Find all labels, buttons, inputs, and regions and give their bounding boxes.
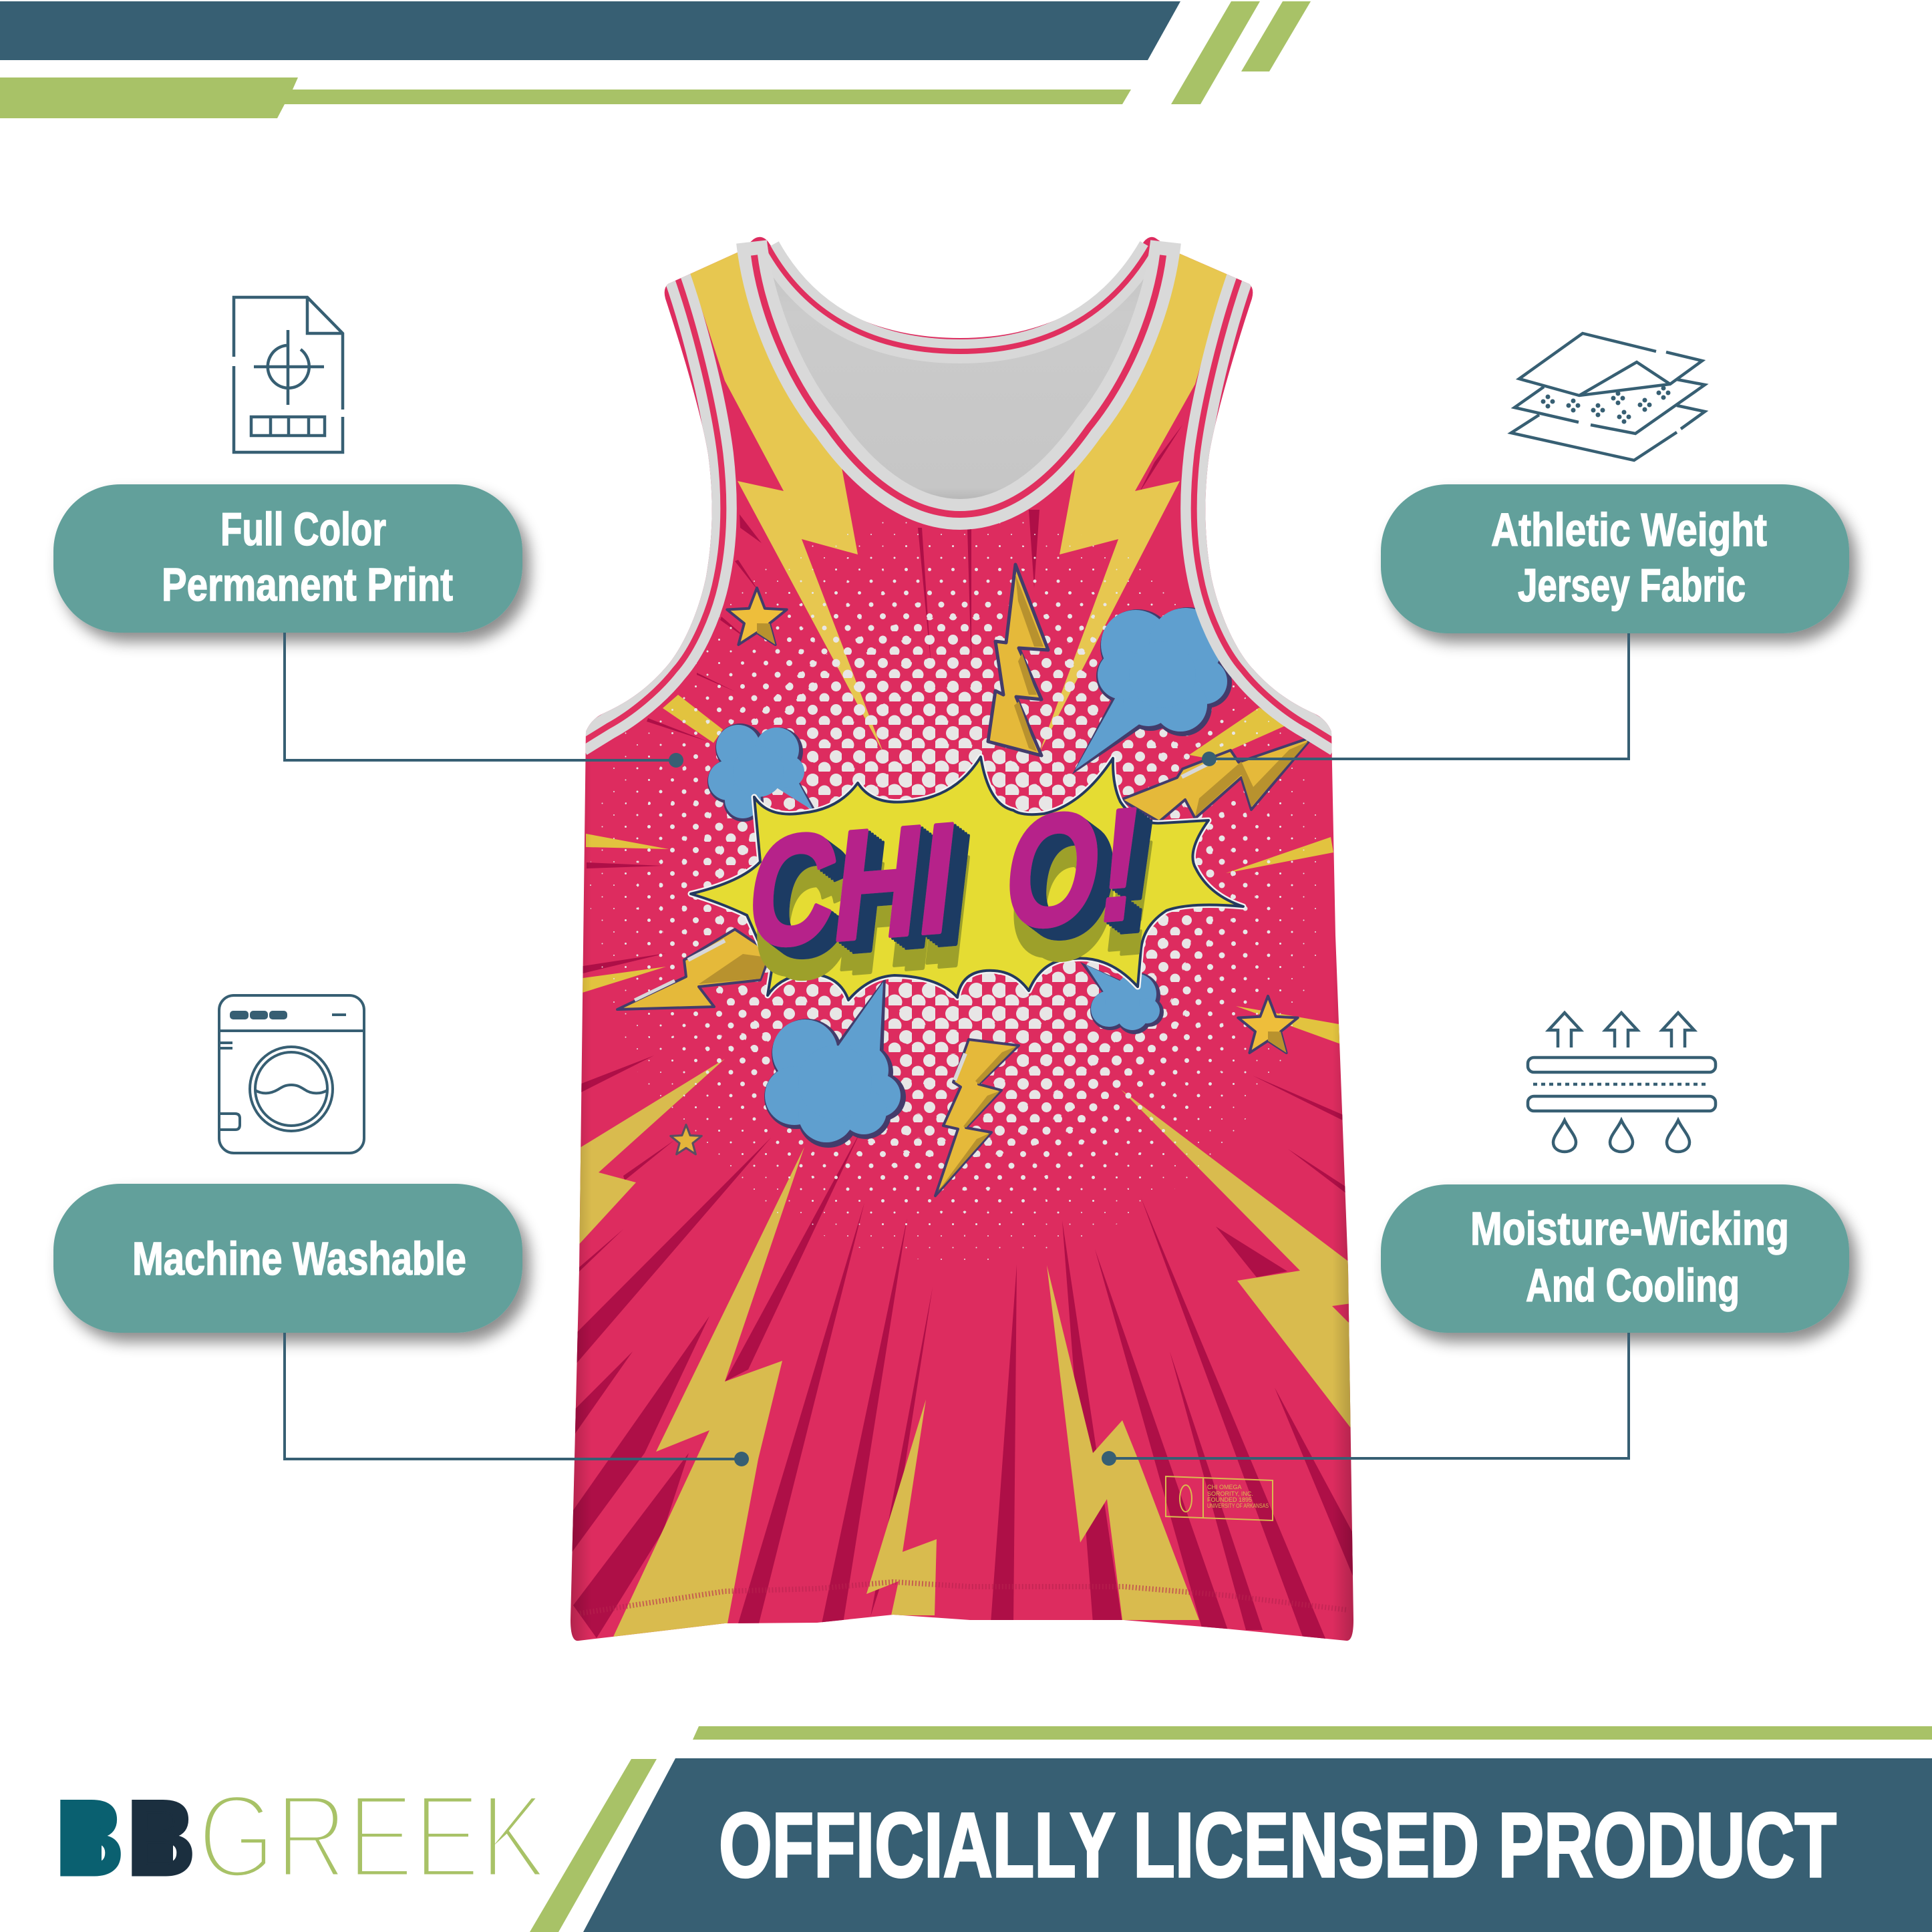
logo: BB Greek: B xyxy=(55,1778,124,1899)
cloud lower right xyxy=(1080,962,1164,1034)
CHI O! lettering: O! xyxy=(997,774,1150,963)
connector: full color to jersey xyxy=(285,633,683,768)
star upper left xyxy=(727,588,787,645)
left armhole trim xyxy=(580,277,723,744)
footer banner xyxy=(583,1758,1932,1932)
front collar xyxy=(752,242,1166,514)
star right xyxy=(1238,996,1298,1053)
green slash long xyxy=(1171,1,1260,104)
logo: BB Greek: GREEK xyxy=(198,1770,546,1903)
feature pill: athletic weight: Jersey Fabric xyxy=(1518,559,1746,611)
logo: BB Greek xyxy=(55,1770,546,1903)
icon: print file xyxy=(234,297,343,452)
CHI O! lettering xyxy=(740,774,1150,981)
sorority label tag: SORORITY, INC. xyxy=(1207,1490,1253,1497)
lightning bolt top centre xyxy=(988,565,1048,756)
feature pill: machine washable xyxy=(53,1184,522,1333)
hem stitching xyxy=(580,1582,1348,1613)
logo: BB Greek: B xyxy=(126,1778,196,1899)
feature pill: moisture wicking: Moisture-Wicking xyxy=(1470,1202,1789,1255)
right armhole trim xyxy=(1194,277,1337,744)
feature pill: athletic weight xyxy=(1381,484,1849,633)
sorority label tag: CHI OMEGA xyxy=(1207,1484,1242,1490)
feature pill: full color: Permanent Print xyxy=(162,558,453,611)
inner back of jersey xyxy=(766,247,1152,514)
star lower left xyxy=(671,1125,701,1154)
sorority label tag: FOUNDED 1895 xyxy=(1207,1496,1252,1503)
feature pill: athletic weight: Athletic Weight xyxy=(1491,504,1767,556)
cloud upper left xyxy=(707,723,818,822)
top green bar xyxy=(0,77,1131,118)
connector: machine washable to jersey xyxy=(285,1333,749,1466)
yellow lightning bolts and bursts xyxy=(575,247,1356,1637)
feature pill: full color xyxy=(53,484,522,633)
lightning bolt right xyxy=(1121,737,1313,822)
icon: fabric layers xyxy=(1511,333,1705,460)
lightning bolt left xyxy=(617,929,771,1009)
footer green bar xyxy=(693,1726,1932,1740)
lightning bolt bottom centre xyxy=(935,1039,1019,1196)
edge shading xyxy=(568,735,1356,1643)
connector: athletic weight to jersey xyxy=(1202,633,1629,766)
radiating dark rays xyxy=(571,425,1356,1640)
top banner bars xyxy=(0,1,1311,118)
icon: moisture wicking xyxy=(1528,1013,1716,1152)
comic burst star xyxy=(691,757,1243,1000)
icon: washing machine xyxy=(219,995,364,1153)
CHI O! lettering: CHI xyxy=(740,789,964,981)
feature pill: moisture wicking xyxy=(1381,1184,1849,1333)
back collar xyxy=(768,247,1150,351)
feature pill: moisture wicking: And Cooling xyxy=(1526,1259,1740,1311)
cloud top right xyxy=(1072,607,1232,774)
feature pill: machine washable: Machine Washable xyxy=(132,1233,466,1285)
green slash short xyxy=(1241,1,1311,71)
top dark bar xyxy=(0,1,1180,60)
footer green slash xyxy=(530,1759,657,1932)
jersey printed body xyxy=(561,227,1363,1650)
connector: moisture wicking to jersey xyxy=(1102,1333,1629,1466)
jersey xyxy=(561,227,1363,1650)
sorority label tag xyxy=(1166,1476,1273,1520)
feature pill: full color: Full Color xyxy=(220,503,386,555)
sorority label tag: UNIVERSITY OF ARKANSAS xyxy=(1207,1502,1269,1509)
cloud lower left xyxy=(764,977,906,1148)
halftone dot field xyxy=(590,513,1325,1261)
